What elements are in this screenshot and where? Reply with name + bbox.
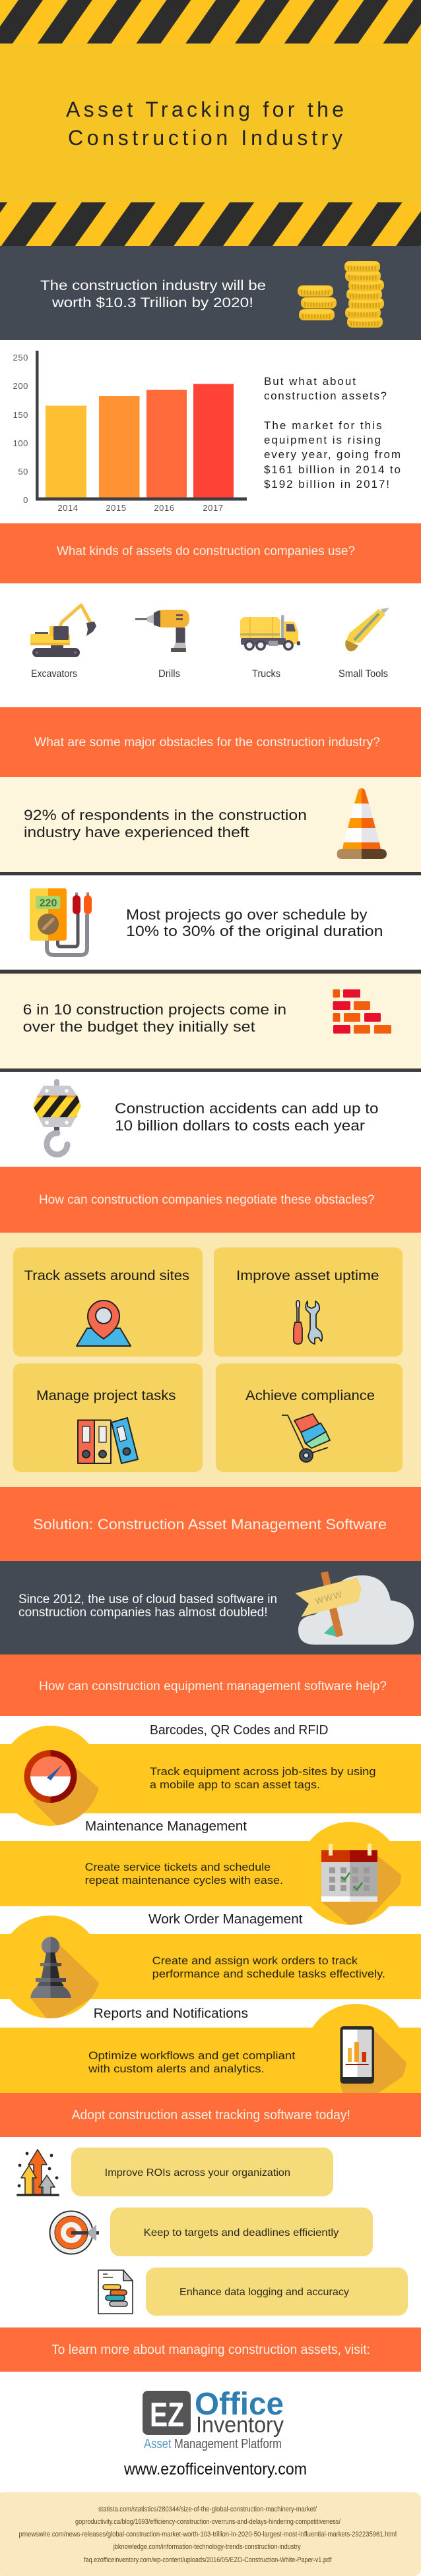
text block: construction assets: $161 billion in 2014 to — [264, 463, 401, 476]
text block: construction assets: construction assets? — [264, 390, 387, 402]
x axis labels — [57, 503, 224, 513]
theft text — [24, 807, 307, 840]
icon: calendar — [310, 1822, 401, 1925]
description: barcodes: a mobile app to scan asset tags. — [150, 1778, 320, 1791]
icon: gauge — [11, 1726, 99, 1826]
description: barcodes — [150, 1765, 376, 1791]
axes — [36, 351, 247, 501]
pill: data logging: Enhance data logging and accuracy — [179, 2287, 349, 2298]
pill: targets: Keep to targets and deadlines efficiently — [144, 2227, 339, 2239]
heading: software help: How can construction equipment management software help? — [39, 1680, 387, 1693]
bottom hazard stripes — [0, 202, 421, 246]
label: drills: Drills — [158, 668, 180, 680]
panel: budget row — [0, 974, 421, 1068]
card: manage tasks — [13, 1363, 203, 1472]
schedule text — [126, 906, 383, 939]
bars — [46, 384, 234, 498]
x axis labels: 2015 — [106, 503, 127, 513]
panel: sources — [0, 2492, 421, 2576]
feature: work orders — [0, 1912, 421, 2024]
panel: accidents row — [33, 1079, 377, 1157]
panel: sources: faq.ezofficeinventory.com/wp-content/uploads/2016/05/EZO-Construction-White-Paper-v1.pdf — [84, 2556, 332, 2564]
heading: adopt software: Adopt construction asset tracking software today! — [72, 2108, 350, 2122]
icon: binders — [78, 1418, 138, 1463]
feature: barcodes — [0, 1723, 421, 1829]
icon: screwdriver and wrench — [294, 1301, 322, 1344]
description: work orders — [152, 1954, 385, 1980]
logo: EZ Office Inventory: Asset Management Platform — [144, 2437, 282, 2451]
panel: cloud software — [0, 1561, 421, 1654]
benefit: improve ROIs — [17, 2148, 333, 2196]
icon: coin stacks — [298, 261, 384, 328]
heading: solution: Solution: Construction Asset Management Software — [33, 1516, 387, 1533]
heading: maintenance: Maintenance Management — [85, 1819, 247, 1834]
y axis labels: 0 — [23, 495, 28, 505]
text block: construction assets: every year, going from — [264, 448, 401, 461]
panel: sources: jbknowledge.com/information-technology-trends-construction-industry — [113, 2543, 301, 2551]
panel: sources: statista.com/statistics/280344/size-of-the-global-construction-machinery-market/ — [98, 2505, 317, 2513]
benefit: data logging — [98, 2268, 408, 2316]
icon: traffic cone — [337, 788, 387, 859]
heading: negotiate obstacles — [0, 1167, 421, 1233]
x axis labels: 2014 — [57, 503, 79, 513]
title: Construction Industry — [68, 126, 342, 150]
text block: construction assets — [264, 375, 401, 490]
pill: targets — [110, 2208, 373, 2256]
card: achieve compliance: Achieve compliance — [245, 1388, 375, 1403]
market worth text — [40, 278, 266, 310]
icon: multimeter: 220 — [40, 898, 57, 909]
hero banner — [0, 0, 421, 246]
icon: hand truck — [282, 1414, 330, 1462]
logo: EZ Office Inventory: EZ — [150, 2396, 184, 2434]
text block: construction assets: But what about — [264, 375, 356, 388]
schedule text: 10% to 30% of the original duration — [126, 923, 383, 939]
title — [66, 98, 344, 150]
description: reports — [88, 2049, 296, 2075]
icon: map pin — [77, 1301, 131, 1346]
text block: construction assets: $192 billion in 2017! — [264, 478, 389, 490]
icon: cloud with www sign — [296, 1571, 414, 1645]
icon: utility knife — [345, 608, 389, 651]
heading: solution — [0, 1487, 421, 1561]
y axis labels: 50 — [18, 467, 28, 477]
description: maintenance — [85, 1861, 283, 1887]
y axis labels: 150 — [13, 410, 28, 420]
description: work orders: performance and schedule tasks effectively. — [152, 1968, 385, 1980]
benefit: targets and deadlines — [50, 2208, 373, 2256]
heading: obstacles — [0, 707, 421, 777]
heading: software help — [0, 1654, 421, 1716]
icon: phone analytics — [312, 2004, 406, 2093]
accidents text: Construction accidents can add up to — [115, 1100, 379, 1117]
description: reports: Optimize workflows and get compliant — [88, 2049, 296, 2062]
text block: construction assets: The market for this — [264, 419, 381, 432]
label: small tools: Small Tools — [339, 668, 388, 680]
top hazard stripes — [0, 0, 421, 44]
description: work orders: Create and assign work orders to track — [152, 1954, 358, 1967]
x axis labels: 2017 — [203, 503, 224, 513]
card: track assets: Track assets around sites — [24, 1268, 189, 1283]
card: achieve compliance — [216, 1363, 403, 1472]
heading: work orders: Work Order Management — [148, 1912, 303, 1927]
budget text: over the budget they initially set — [23, 1018, 255, 1035]
icon: excavator — [30, 605, 96, 657]
heading: kinds of assets: What kinds of assets do construction companies use? — [57, 544, 355, 558]
card: track assets — [13, 1247, 203, 1357]
icon: multimeter — [30, 889, 92, 955]
panel: schedule row — [0, 875, 421, 970]
theft text: 92% of respondents in the construction — [24, 807, 307, 823]
theft text: industry have experienced theft — [24, 824, 249, 840]
y axis labels — [13, 353, 28, 505]
cloud text — [18, 1593, 277, 1620]
y axis labels: 200 — [13, 381, 28, 391]
bar chart — [13, 351, 247, 513]
label: trucks: Trucks — [252, 668, 280, 680]
budget text: 6 in 10 construction projects come in — [23, 1001, 286, 1018]
description: barcodes: Track equipment across job-sites by using — [150, 1765, 376, 1778]
website url: www.ezofficeinventory.com — [123, 2460, 307, 2478]
feature: reports — [0, 2004, 421, 2093]
label: excavators: Excavators — [31, 668, 77, 680]
heading: learn more: To learn more about managing construction assets, visit: — [51, 2343, 370, 2357]
icon: bricks — [333, 989, 391, 1034]
logo: EZ Office Inventory: Inventory — [196, 2413, 284, 2438]
card: improve uptime — [214, 1247, 403, 1357]
icon: document with stack — [98, 2270, 133, 2314]
panel: solutions grid — [0, 1233, 421, 1487]
heading: reports: Reports and Notifications — [94, 2006, 248, 2021]
accidents text: 10 billion dollars to costs each year — [115, 1117, 365, 1134]
accidents text — [115, 1100, 379, 1134]
icon: chess pawn — [10, 1916, 99, 2018]
budget text — [23, 1001, 286, 1035]
icon: target — [50, 2211, 99, 2254]
pill: ROIs: Improve ROIs across your organization — [105, 2167, 290, 2179]
text block: construction assets: equipment is rising — [264, 434, 381, 446]
icon: rising arrows — [17, 2150, 59, 2196]
pill: ROIs — [71, 2148, 333, 2196]
y axis labels: 100 — [13, 438, 28, 448]
logo: EZ Office Inventory: Office — [195, 2387, 284, 2422]
feature: maintenance — [0, 1819, 421, 1931]
heading: adopt software — [0, 2093, 421, 2137]
title: Asset Tracking for the — [66, 98, 344, 121]
panel: sources: goproductivity.ca/blog/1693/efficiency-construction-overruns-and-delays-hindering-competitiveness/ — [75, 2518, 341, 2526]
panel: market worth — [0, 246, 421, 340]
card: manage tasks: Manage project tasks — [36, 1388, 176, 1403]
heading: learn more — [0, 2327, 421, 2372]
pill: data logging — [146, 2268, 408, 2316]
heading: obstacles: What are some major obstacles for the construction industry? — [34, 736, 380, 749]
heading: negotiate obstacles: How can construction companies negotiate these obstacles? — [39, 1193, 375, 1207]
description: reports: with custom alerts and analytics. — [88, 2063, 265, 2075]
icon: drill — [135, 610, 189, 652]
panel: theft row — [0, 777, 421, 872]
cloud text: construction companies has almost doubled! — [18, 1606, 268, 1620]
icon: cloud with www sign: www — [313, 1587, 344, 1607]
heading: barcodes: Barcodes, QR Codes and RFID — [150, 1723, 329, 1738]
y axis labels: 250 — [13, 353, 28, 363]
description: maintenance: repeat maintenance cycles with ease. — [85, 1874, 283, 1887]
cloud text: Since 2012, the use of cloud based software in — [18, 1593, 277, 1606]
icon: crane hook — [33, 1079, 81, 1157]
market worth text: The construction industry will be — [40, 278, 266, 293]
icon: truck — [240, 615, 300, 651]
schedule text: Most projects go over schedule by — [126, 906, 367, 923]
description: maintenance: Create service tickets and schedule — [85, 1861, 271, 1873]
x axis labels: 2016 — [154, 503, 175, 513]
logo: EZ Office Inventory — [143, 2387, 284, 2451]
heading: kinds of assets — [0, 523, 421, 583]
market worth text: worth $10.3 Trillion by 2020! — [51, 295, 253, 310]
card: improve uptime: Improve asset uptime — [236, 1268, 379, 1283]
